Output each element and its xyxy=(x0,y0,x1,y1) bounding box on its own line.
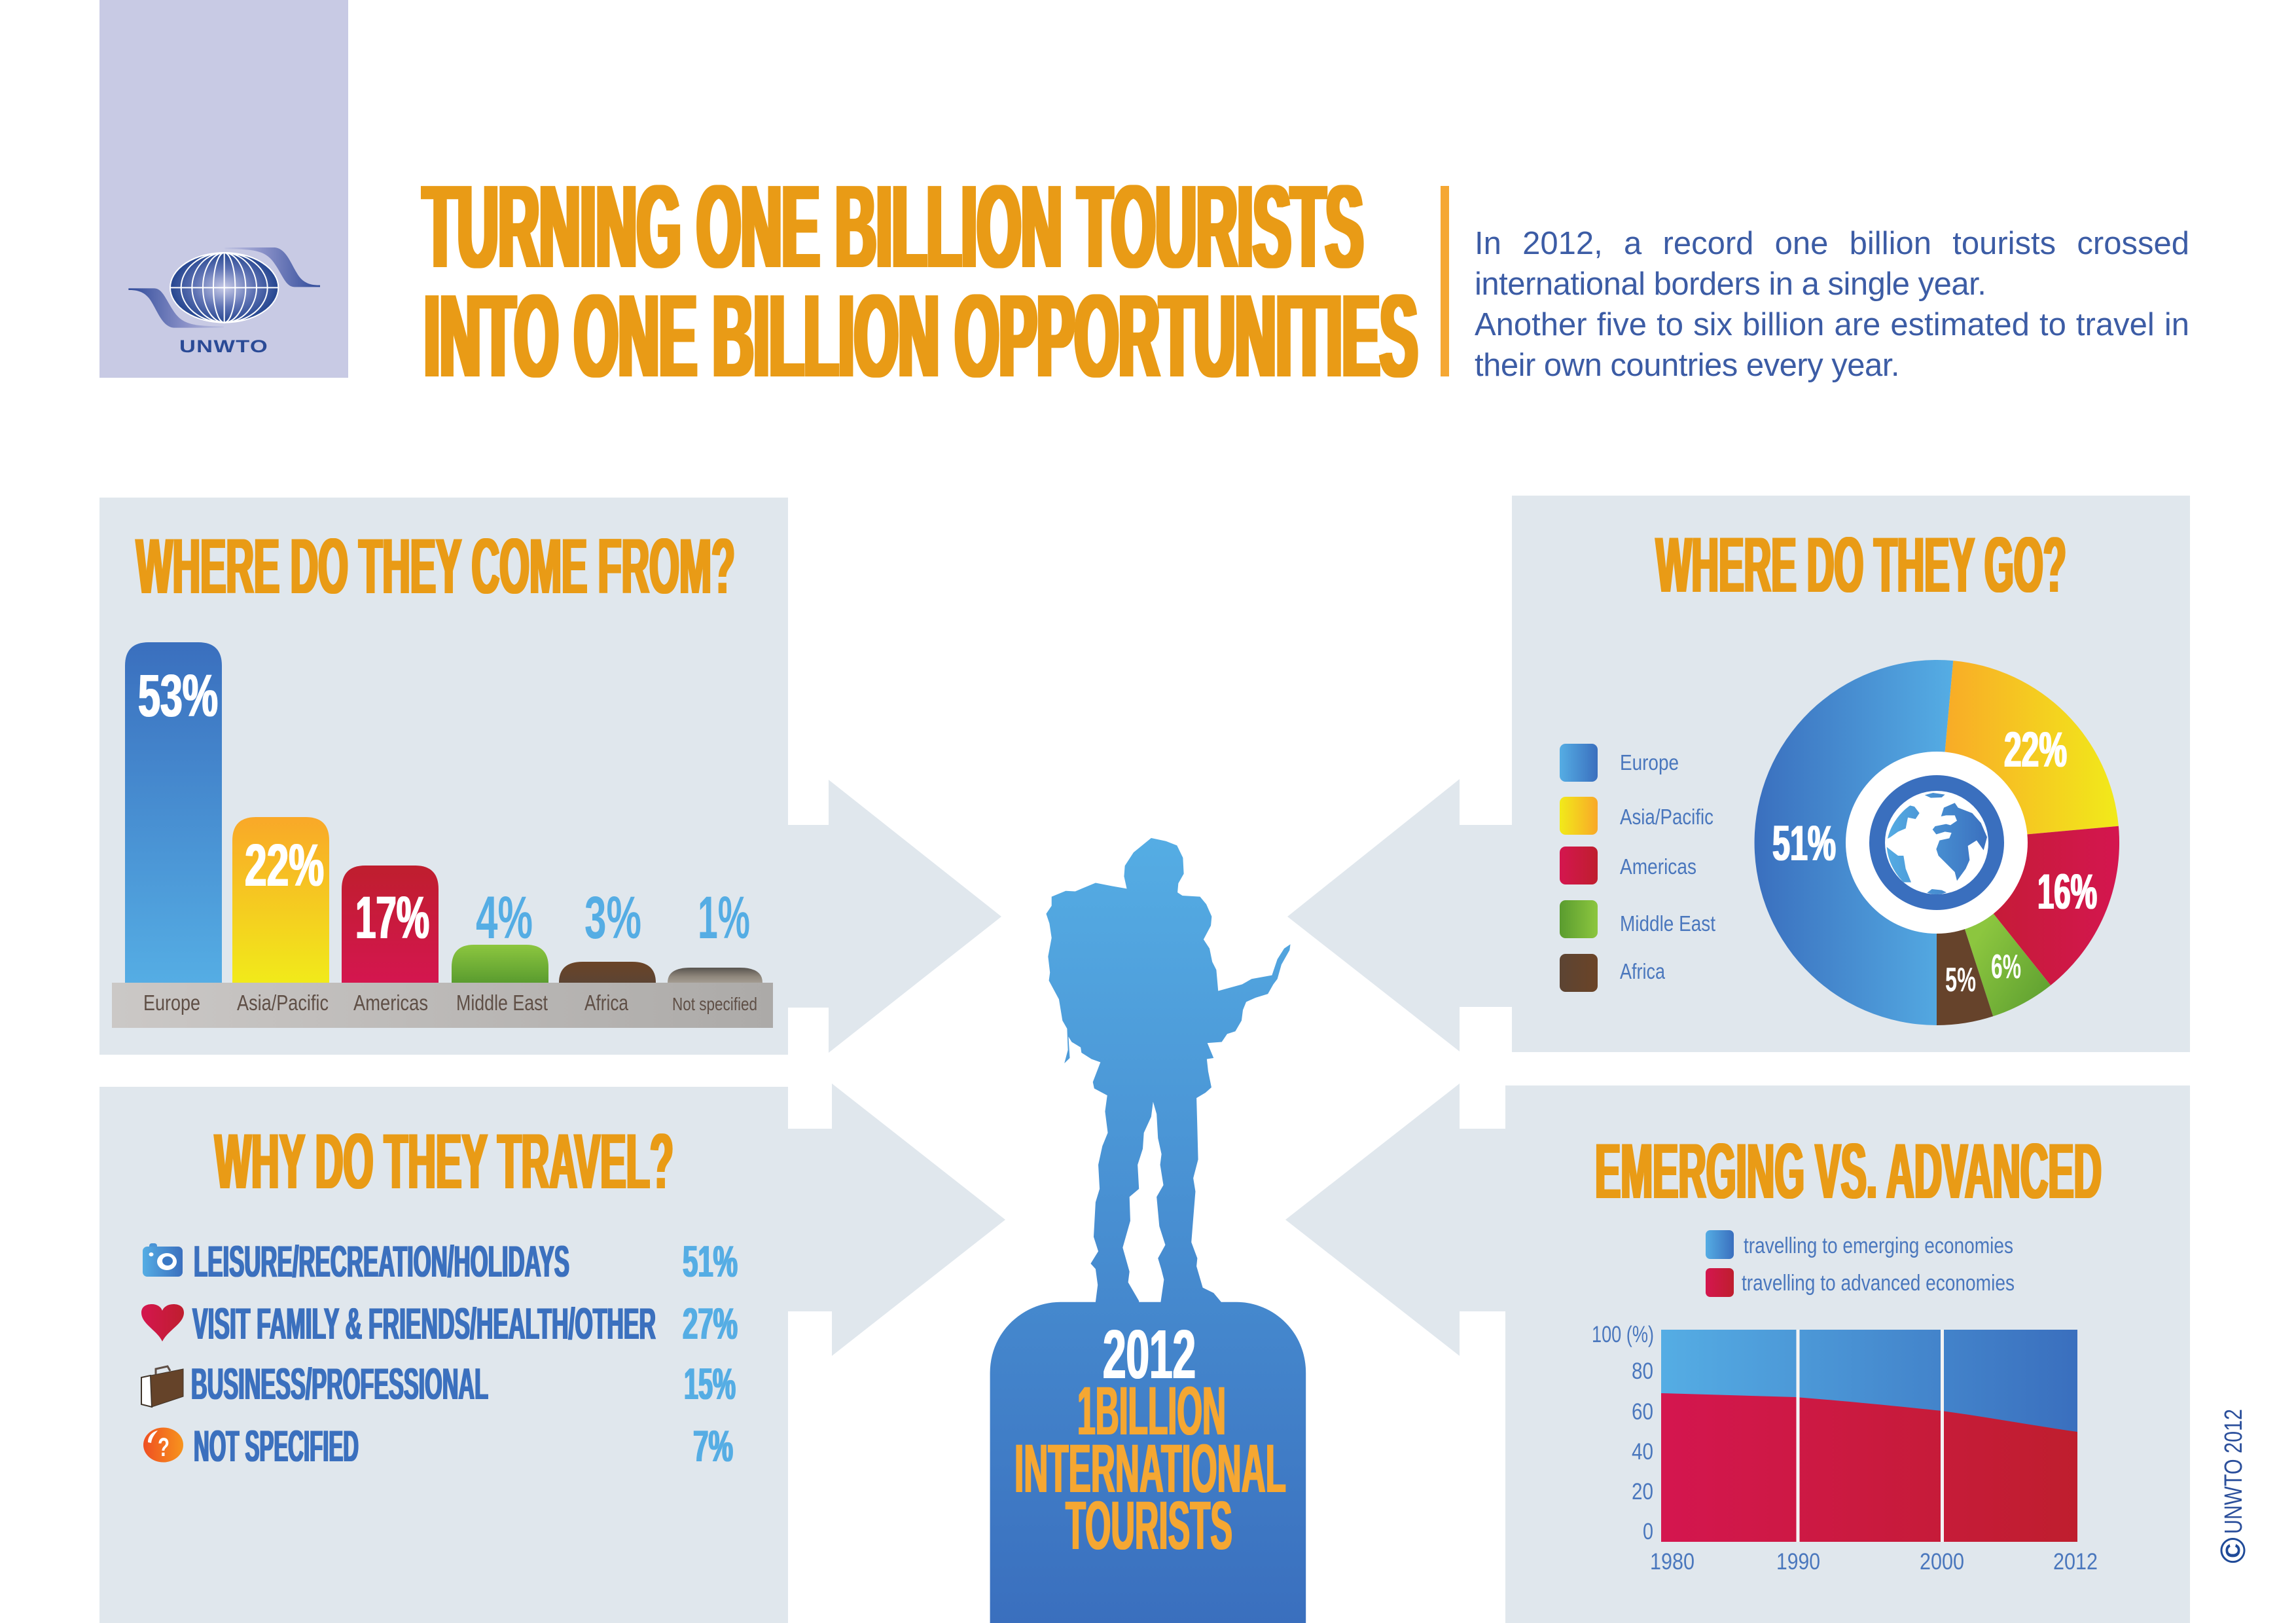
legend: destinations xyxy=(1560,744,1715,992)
bar chart: origin regions: Not specified xyxy=(672,994,757,1014)
legend: economies xyxy=(1706,1230,2015,1297)
area chart: emerging vs advanced share: 60 xyxy=(1632,1399,1653,1425)
bar chart: origin regions: 3% xyxy=(584,884,641,951)
pedestal text: 2012 one billion international tourists: 2012 xyxy=(1103,1316,1196,1393)
area chart: emerging vs advanced share: 2012 xyxy=(2053,1549,2098,1575)
legend: destinations: Europe xyxy=(1620,750,1679,775)
bar chart: origin regions: Asia/Pacific xyxy=(237,991,329,1015)
panel: where do they come from xyxy=(99,498,1001,1055)
icon: UNWTO globe logo xyxy=(128,247,320,328)
bar chart: origin regions: 22% xyxy=(245,832,324,899)
arrow: where they go to traveller xyxy=(1287,779,1512,1051)
donut chart: destinations: 5% xyxy=(1945,961,1976,999)
legend: economies: travelling to advanced economies xyxy=(1742,1271,2015,1296)
area chart: emerging vs advanced share xyxy=(1592,1322,2098,1575)
reason: not specified xyxy=(194,1421,733,1471)
arrow: come from to traveller xyxy=(788,780,1001,1053)
icon: backpacker silhouette and pedestal xyxy=(990,838,1306,1623)
bar chart: origin regions: 17% xyxy=(355,884,429,951)
donut chart: destinations: 16% xyxy=(2037,864,2097,920)
panel: why do they travel xyxy=(99,1084,1005,1623)
intro text: In 2012, a record one billion tourists crossed xyxy=(1475,226,2189,261)
icon: heart xyxy=(141,1304,184,1341)
area chart: emerging vs advanced share: 1990 xyxy=(1776,1549,1820,1575)
bar chart: origin regions: Americas xyxy=(353,991,428,1015)
reason: not specified: NOT SPECIFIED xyxy=(194,1421,359,1471)
intro text xyxy=(1475,226,2189,383)
legend: economies: travelling to emerging economies xyxy=(1744,1233,2013,1258)
logo panel: UNWTO xyxy=(99,0,348,378)
area chart: emerging vs advanced share: 100 (%) xyxy=(1592,1322,1654,1347)
bar chart: origin regions: 53% xyxy=(138,663,218,729)
intro text: their own countries every year. xyxy=(1475,348,1899,383)
copyright: © xyxy=(2214,1537,2253,1563)
area chart: emerging vs advanced share: 2000 xyxy=(1920,1549,1964,1575)
panel: where do they go xyxy=(1287,496,2190,1052)
central figure: traveller on pedestal: INTERNATIONAL xyxy=(1014,1431,1286,1507)
central figure: traveller on pedestal xyxy=(990,838,1306,1623)
reason: not specified: 7% xyxy=(693,1421,733,1471)
icon: camera xyxy=(143,1243,183,1277)
bar chart: origin regions xyxy=(112,642,773,1028)
donut chart: destinations: 51% xyxy=(1772,816,1836,871)
legend: destinations: Americas xyxy=(1620,854,1696,879)
legend: destinations: Asia/Pacific xyxy=(1620,805,1713,829)
reason: business: 15% xyxy=(684,1359,736,1409)
icon: globe oceans xyxy=(1887,793,1987,894)
bar chart: origin regions: Europe xyxy=(143,991,200,1015)
panel: emerging vs advanced xyxy=(1285,1084,2190,1623)
area chart: emerging vs advanced share: 20 xyxy=(1632,1479,1653,1504)
donut chart: destinations: 22% xyxy=(2004,722,2067,778)
area chart: emerging vs advanced share: 80 xyxy=(1632,1359,1653,1384)
intro text: international borders in a single year. xyxy=(1475,266,1986,302)
legend: destinations: Africa xyxy=(1620,959,1666,983)
panel: why do they travel: WHY DO THEY TRAVEL? xyxy=(215,1118,673,1205)
bar chart: origin regions: 1% xyxy=(698,884,750,951)
arrow: why travel to traveller xyxy=(788,1084,1005,1356)
title xyxy=(423,161,1418,402)
reason: visit family xyxy=(192,1299,738,1349)
reason: leisure: LEISURE/RECREATION/HOLIDAYS xyxy=(194,1237,569,1286)
icon: briefcase xyxy=(141,1366,183,1407)
arrow: emerging vs advanced to traveller xyxy=(1285,1084,1505,1356)
bar chart: origin regions: Africa xyxy=(584,991,629,1015)
logo wordmark: UNWTO xyxy=(179,337,268,356)
bar chart: origin regions: 4% xyxy=(476,884,533,951)
panel: where do they come from: WHERE DO THEY COME FROM? xyxy=(136,522,735,610)
reason: business: BUSINESS/PROFESSIONAL xyxy=(191,1359,488,1409)
icon: question mark: ? xyxy=(158,1433,170,1462)
intro text: Another five to six billion are estimated to travel in xyxy=(1475,307,2189,342)
area chart: emerging vs advanced share: 0 xyxy=(1643,1519,1653,1544)
legend: destinations: Middle East xyxy=(1620,911,1715,936)
reason: visit family: VISIT FAMILY & FRIENDS/HEALTH/OTHER xyxy=(192,1299,656,1349)
area chart: emerging vs advanced share: 40 xyxy=(1632,1439,1653,1465)
reason: leisure: 51% xyxy=(683,1237,738,1286)
copyright xyxy=(2214,1409,2253,1563)
copyright: UNWTO 2012 xyxy=(2220,1409,2248,1534)
bar chart: origin regions: Middle East xyxy=(456,991,548,1015)
pedestal text: 2012 one billion international tourists: TOURISTS xyxy=(1066,1487,1232,1564)
area chart: emerging vs advanced share: 1980 xyxy=(1650,1549,1695,1575)
donut chart: destinations xyxy=(1755,660,2119,1025)
donut chart: destinations: 6% xyxy=(1991,948,2021,986)
icon: question mark xyxy=(143,1427,183,1463)
pedestal text: 2012 one billion international tourists: 1BILLION xyxy=(1077,1373,1226,1450)
pedestal text: 2012 one billion international tourists xyxy=(1014,1316,1286,1564)
reason: visit family: 27% xyxy=(683,1299,738,1349)
